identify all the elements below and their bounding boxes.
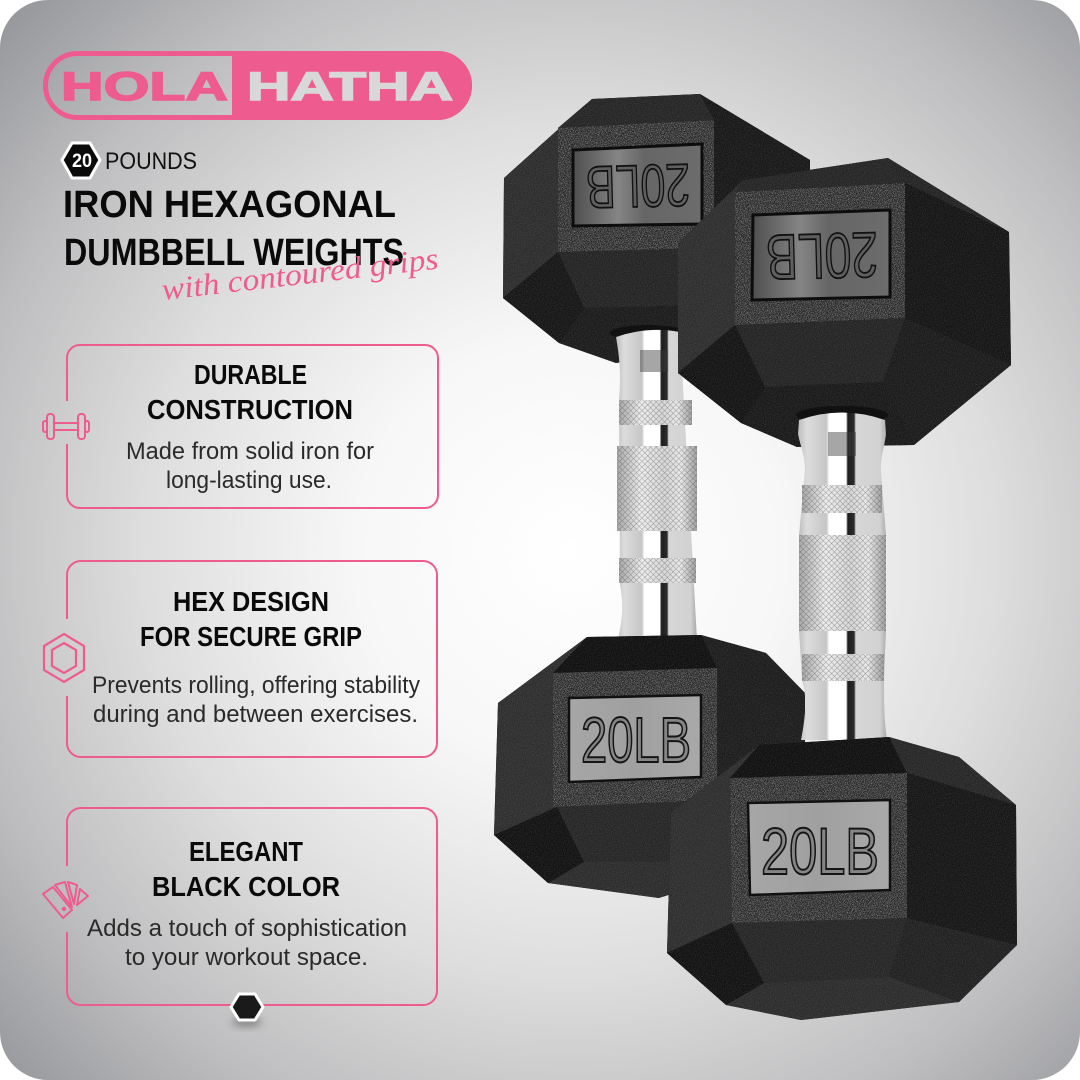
panel: elegant black color <box>43 808 437 1005</box>
back top weight head <box>503 94 810 363</box>
heading: BLACK COLOR <box>152 871 340 902</box>
panel: durable construction <box>43 345 438 508</box>
subtitle script: with contoured grips <box>160 241 440 307</box>
description <box>92 672 420 728</box>
description: Made from solid iron for <box>126 438 374 465</box>
heading <box>140 586 362 652</box>
title <box>63 184 404 274</box>
front handle <box>796 406 888 740</box>
front top weight head <box>678 158 1011 447</box>
heading: FOR SECURE GRIP <box>140 621 362 652</box>
logo: Hola Hatha <box>46 51 472 120</box>
description <box>126 438 374 494</box>
heading: ELEGANT <box>189 836 303 867</box>
badge: 20 pounds <box>62 143 197 178</box>
dumbbell: back <box>494 94 810 898</box>
icon: dumbbell <box>43 414 89 439</box>
front bottom weight head <box>667 737 1017 1020</box>
badge: 20 pounds: 20 <box>72 151 92 172</box>
icon: hexagon <box>44 634 84 682</box>
description: to your workout space. <box>125 944 368 971</box>
description: Prevents rolling, offering stability <box>92 672 420 699</box>
panel: hex design <box>44 561 437 757</box>
description <box>87 915 407 971</box>
front bottom weight head: 20LB <box>761 814 879 888</box>
heading <box>147 359 353 425</box>
description: during and between exercises. <box>93 701 418 728</box>
icon: swatch fan <box>43 882 88 918</box>
description: Adds a touch of sophistication <box>87 915 407 942</box>
bottom hexagon marker <box>231 994 263 1027</box>
dumbbell: front <box>667 158 1017 1020</box>
back bottom weight head: 20LB <box>581 704 691 776</box>
heading: CONSTRUCTION <box>147 394 353 425</box>
heading: DURABLE <box>194 359 307 390</box>
back handle <box>610 325 697 640</box>
heading <box>152 836 340 902</box>
front top weight head: 20LB <box>765 219 879 293</box>
title: DUMBBELL WEIGHTS <box>64 232 404 274</box>
title: IRON HEXAGONAL <box>63 184 396 226</box>
back bottom weight head <box>494 635 805 898</box>
logo: Hola Hatha: HATHA <box>247 65 453 109</box>
heading: HEX DESIGN <box>173 586 329 617</box>
description: long-lasting use. <box>166 467 332 494</box>
logo: Hola Hatha: HOLA <box>61 65 228 109</box>
badge: 20 pounds: POUNDS <box>105 148 197 175</box>
back top weight head: 20LB <box>585 151 691 221</box>
